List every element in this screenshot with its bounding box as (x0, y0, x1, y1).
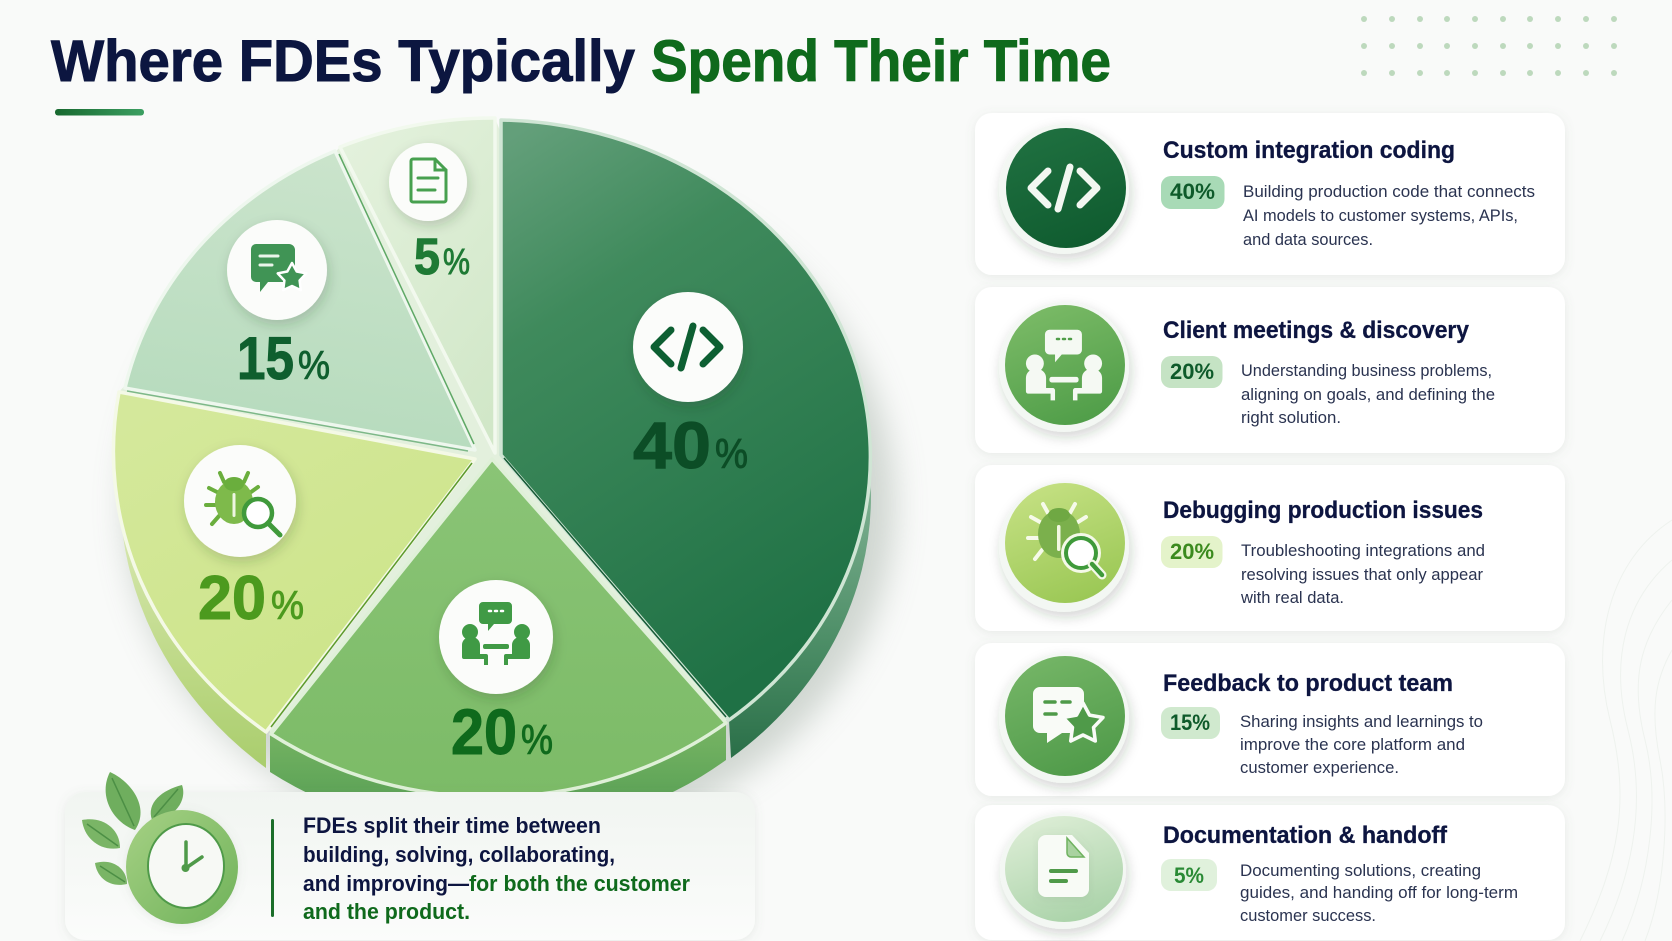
percent badge: 40% (1170, 179, 1215, 204)
panel: summary callout (65, 772, 755, 940)
description: customer success. (1240, 907, 1376, 925)
panel: feedback to product team (975, 643, 1565, 796)
slice: documentation 5% (340, 118, 495, 453)
description: guides, and handing off for long-term (1240, 884, 1518, 902)
title: Spend Their Time (651, 29, 1111, 94)
percent badge (1161, 176, 1224, 209)
description (1240, 542, 1485, 607)
callout text: and improving— (303, 871, 469, 896)
pie label: 20% debugging (198, 564, 304, 633)
pie label: 5%: 5 (414, 228, 440, 285)
callout text: for both the customer (469, 871, 690, 896)
description: improve the core platform and (1240, 736, 1465, 754)
pie label: 5% (414, 228, 470, 285)
percent badge (1161, 859, 1217, 891)
pie label: 20% meetings: 20 (451, 696, 517, 768)
description: Documenting solutions, creating (1240, 862, 1481, 880)
icon: code badge (999, 124, 1129, 254)
description: and data sources. (1243, 231, 1373, 249)
title: Where FDEs Typically (51, 29, 635, 94)
callout text: FDEs split their time between (303, 813, 601, 838)
slice: feedback 15% (125, 151, 475, 450)
pie icon: feedback bubble (227, 220, 327, 320)
description: customer experience. (1240, 759, 1399, 777)
icon: feedback badge (999, 653, 1129, 783)
pie 3D side walls (118, 455, 871, 835)
heading: Documentation & handoff (1163, 822, 1448, 849)
pie label: 20% meetings: % (521, 716, 553, 763)
panel: custom integration coding (975, 113, 1565, 275)
percent badge: 20% (1170, 539, 1214, 564)
percent badge: 15% (1170, 710, 1210, 735)
description (1240, 713, 1483, 777)
decorative dot grid (1361, 16, 1617, 76)
pie icon: document (389, 143, 467, 221)
description: aligning on goals, and defining the (1241, 386, 1495, 404)
percent badge (1161, 356, 1222, 388)
pie label: 15%: % (298, 344, 330, 388)
percent badge (1161, 536, 1222, 568)
pie label: 15%: 15 (237, 325, 294, 392)
pie label: 20% debugging: % (271, 584, 304, 628)
pie icon: bug with magnifier (184, 445, 296, 557)
description (1243, 183, 1535, 249)
description: right solution. (1241, 409, 1341, 427)
callout text: and the product. (303, 899, 470, 924)
description: Troubleshooting integrations and (1241, 542, 1485, 560)
description: Sharing insights and learnings to (1240, 713, 1483, 731)
icon: clock with leaves (82, 772, 238, 924)
icon: meeting badge (999, 302, 1129, 432)
pie label: 40% (633, 408, 748, 482)
callout text: building, solving, collaborating, (303, 842, 615, 867)
pie centre base (119, 118, 729, 734)
pie icon: code (633, 292, 743, 402)
pie chart (113, 118, 895, 845)
icon: bug badge (999, 482, 1129, 612)
percent badge (1161, 707, 1220, 739)
slice: client meetings 20% (271, 459, 726, 797)
description: resolving issues that only appear (1241, 566, 1484, 584)
panel: documentation and handoff (975, 805, 1565, 940)
description: Building production code that connects (1243, 183, 1535, 201)
panel: debugging production issues (975, 465, 1565, 631)
pie label: 40%: % (715, 430, 748, 477)
callout text (303, 813, 690, 924)
pie label: 20% meetings (451, 696, 553, 768)
heading: Custom integration coding (1163, 137, 1455, 164)
heading: Feedback to product team (1163, 670, 1453, 697)
heading: Debugging production issues (1163, 497, 1483, 524)
percent badge: 5% (1174, 863, 1204, 888)
pie label: 40%: 40 (633, 408, 711, 482)
percent badge: 20% (1170, 359, 1214, 384)
title underline accent (55, 109, 144, 116)
description: AI models to customer systems, APIs, (1243, 207, 1518, 225)
pie icon: meeting (439, 580, 553, 694)
description: with real data. (1240, 589, 1344, 607)
pie label: 20% debugging: 20 (198, 564, 266, 633)
slice: debugging 20% (113, 392, 475, 732)
icon: document badge (1000, 813, 1126, 929)
panel: client meetings and discovery (975, 287, 1565, 453)
description (1240, 862, 1518, 925)
description (1241, 362, 1495, 427)
heading: Client meetings & discovery (1163, 317, 1470, 344)
description: Understanding business problems, (1241, 362, 1492, 380)
slice: custom integration coding 40% (501, 120, 870, 720)
pie label: 5%: % (443, 241, 470, 282)
title (51, 29, 1111, 94)
